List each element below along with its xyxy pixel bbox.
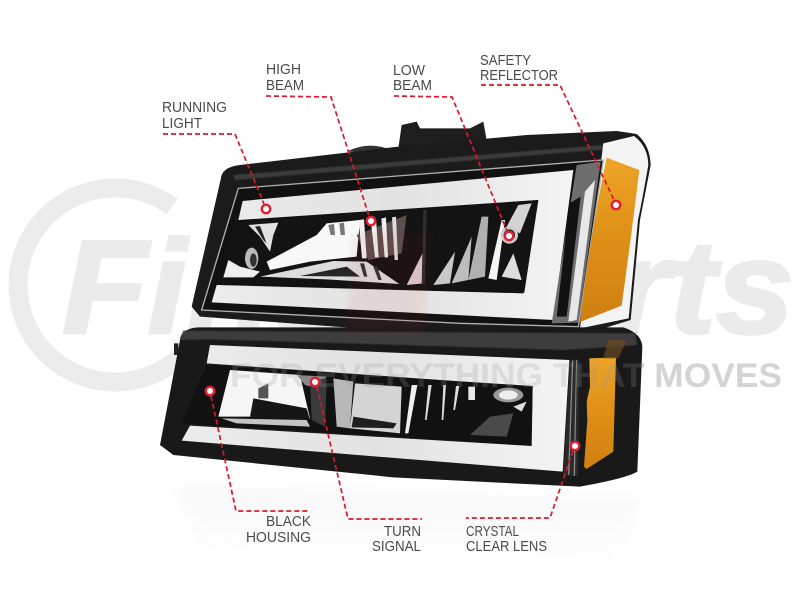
bumper signal (lower lamp) <box>160 327 642 487</box>
side tab <box>174 343 178 355</box>
callout: low beam: BEAM <box>393 77 432 94</box>
callout: crystal clear lens <box>466 442 579 555</box>
callout: safety reflector: SAFETY <box>480 52 531 69</box>
callout: safety reflector <box>480 52 620 209</box>
callout: safety reflector: REFLECTOR <box>480 67 558 84</box>
light bar <box>212 170 573 320</box>
callout: low beam <box>393 62 513 240</box>
light bar <box>182 345 569 472</box>
amber marker <box>584 357 616 469</box>
callout: high beam: BEAM <box>266 77 304 94</box>
mounting bracket <box>398 122 487 148</box>
callout: black housing: HOUSING <box>246 529 311 546</box>
reflector <box>267 220 360 270</box>
watermark logo <box>18 188 794 395</box>
callout: black housing <box>206 387 311 546</box>
headlight (upper lamp) <box>192 122 651 337</box>
callout: high beam: HIGH <box>266 61 301 78</box>
chrome strip <box>563 359 579 476</box>
top grey band <box>180 331 637 350</box>
reflection below lamp <box>175 485 640 570</box>
amber reflector <box>580 158 639 322</box>
translucent watermark over lamp: FOR EVERYTHING THAT MOVES <box>230 357 782 395</box>
callout: low beam: LOW <box>393 62 426 79</box>
inner frame <box>202 160 603 327</box>
callout: crystal clear lens: CLEAR LENS <box>466 538 547 555</box>
callout: high beam <box>266 61 375 225</box>
callout: running light: RUNNING <box>162 99 227 116</box>
callout: running light <box>162 99 270 213</box>
callout: turn signal: TURN <box>384 523 421 540</box>
lens <box>217 200 538 293</box>
callout: turn signal <box>311 378 422 555</box>
lamp body <box>192 131 651 337</box>
clear side glass <box>580 136 648 328</box>
callout: black housing: BLACK <box>266 513 311 530</box>
callout: running light: LIGHT <box>162 115 202 132</box>
lamp body <box>160 327 642 487</box>
top highlight band <box>233 145 605 180</box>
chrome strip <box>552 162 601 323</box>
callout: crystal clear lens: CRYSTAL <box>466 523 519 540</box>
watermark logo: FOR EVERYTHING THAT MOVES <box>230 357 782 395</box>
lens <box>182 365 533 445</box>
red logo tint through lens <box>345 232 432 335</box>
callout: turn signal: SIGNAL <box>372 538 421 555</box>
watermark logo: FinditParts <box>62 214 794 362</box>
bulb housing behind <box>347 146 387 153</box>
